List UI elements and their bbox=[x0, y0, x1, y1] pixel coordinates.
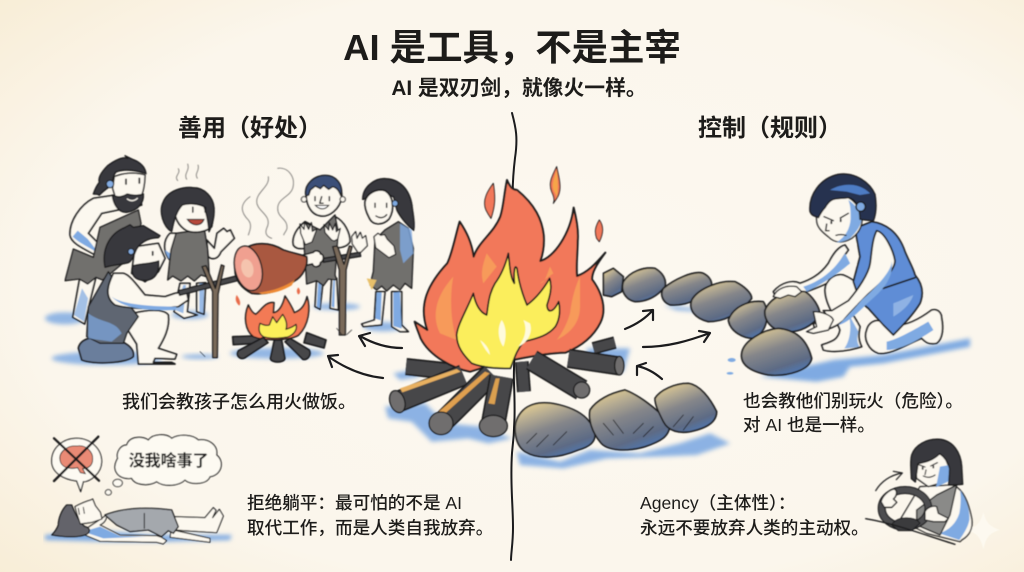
illustration: central bonfire bbox=[385, 167, 730, 468]
caption: refuse lying flat: 拒绝躺平：最可怕的不是 AI bbox=[247, 493, 462, 513]
heading: control: 控制（规则） bbox=[698, 115, 842, 142]
illustration: cave people roasting meat bbox=[45, 156, 414, 365]
hands bbox=[881, 489, 897, 507]
thought text: 没我啥事了 bbox=[129, 451, 209, 470]
caption: teach children danger: 也会教他们别玩火（危险）。 bbox=[743, 391, 963, 411]
small campfire bbox=[233, 287, 326, 362]
stone ring bbox=[603, 268, 623, 297]
motion arrow bbox=[876, 471, 902, 491]
caption: agency bbox=[640, 493, 869, 538]
arrows to the cooking scene bbox=[328, 333, 402, 378]
flames bbox=[415, 180, 605, 372]
body bbox=[170, 508, 223, 542]
subtitle: AI 是双刃剑，就像火一样。 bbox=[391, 76, 647, 100]
shadows bbox=[663, 305, 970, 382]
no-brain icon bbox=[52, 437, 102, 492]
roast meat on spit bbox=[178, 243, 361, 295]
thought bubble bbox=[105, 435, 221, 495]
rear logs bbox=[406, 367, 453, 372]
caption: teach children cooking: 我们会教孩子怎么用火做饭。 bbox=[122, 392, 356, 412]
child clapping bbox=[161, 187, 234, 318]
wooden stakes bbox=[200, 246, 352, 358]
arrows toward the stone ring bbox=[625, 310, 710, 379]
caption: teach children danger: 对 AI 也是一样。 bbox=[743, 415, 875, 435]
front stones bbox=[515, 403, 595, 457]
face and hair bbox=[915, 453, 950, 487]
steering wheel bbox=[882, 490, 928, 527]
boy warming hands bbox=[293, 175, 350, 310]
illustration: person building stone ring bbox=[603, 174, 970, 382]
person kneeling bbox=[773, 174, 943, 353]
man standing bbox=[65, 156, 146, 324]
man seated holding spit bbox=[78, 225, 188, 364]
illustration: person lying flat giving up bbox=[45, 435, 232, 544]
title: AI 是工具，不是主宰 bbox=[343, 27, 681, 68]
caption: refuse lying flat: 取代工作，而是人类自我放弃。 bbox=[247, 518, 493, 538]
caption: refuse lying flat bbox=[247, 493, 493, 538]
dashboard line bbox=[866, 519, 955, 544]
caption: agency: 永远不要放弃人类的主动权。 bbox=[640, 518, 869, 538]
sparkle bbox=[967, 512, 1000, 549]
central divider line bbox=[511, 113, 517, 560]
wood shadows bbox=[385, 348, 730, 468]
torso bbox=[900, 485, 972, 542]
girl warming hands bbox=[352, 179, 414, 332]
front logs bbox=[398, 375, 463, 402]
caption: agency: Agency（主体性）： bbox=[640, 493, 795, 513]
ground shadow bbox=[45, 530, 232, 542]
caption: teach children danger bbox=[743, 391, 963, 435]
ground shadows bbox=[45, 303, 403, 365]
illustration: person at steering wheel bbox=[866, 439, 1000, 549]
steam bbox=[176, 164, 293, 238]
heading: good use: 善用（好处） bbox=[178, 115, 322, 142]
stones in hand bbox=[765, 291, 820, 332]
